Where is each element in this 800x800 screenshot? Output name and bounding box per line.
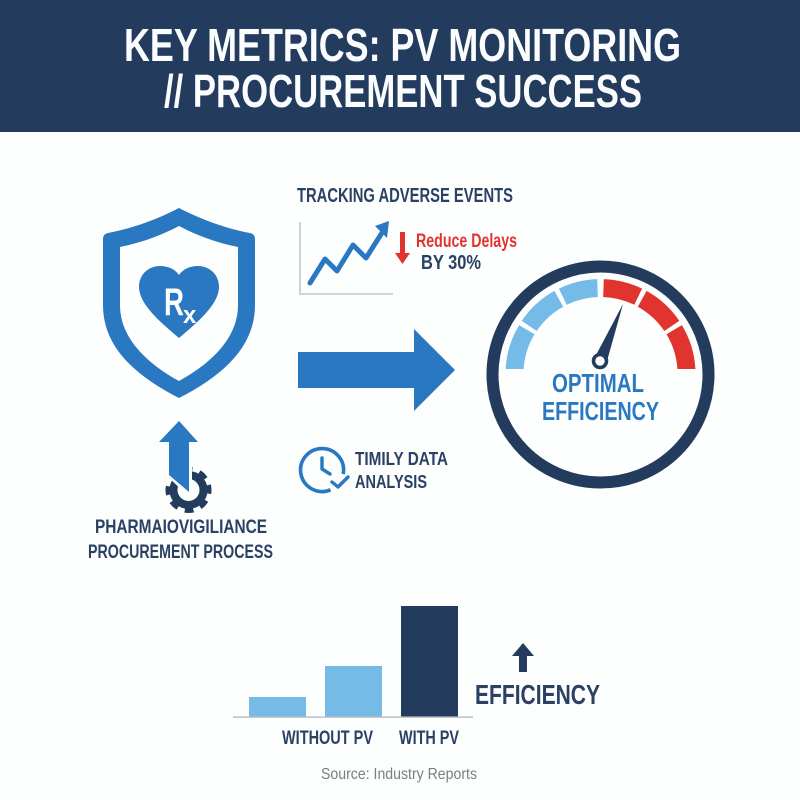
icon: shield with heart and Rx (103, 208, 255, 398)
gauge: optimal efficiency (492, 266, 708, 482)
bar labels: WITHOUT PV (282, 728, 373, 749)
gauge segments: low range (506, 279, 598, 369)
panel: pharmacovigilance procurement process (88, 208, 273, 563)
icon: clock with check (301, 449, 348, 492)
arrow: down red (395, 232, 410, 264)
callout: reduce delays by 30%: Reduce Delays (416, 230, 517, 252)
header banner (0, 0, 800, 132)
callout: timely data analysis (301, 449, 448, 492)
process label: PHARMAIOVIGILIANCE (95, 516, 267, 538)
icon: shield with heart and Rx: x (183, 302, 197, 329)
arrow: main flow right (298, 329, 455, 411)
gauge label (542, 368, 659, 426)
source note: Source: Industry Reports (321, 766, 477, 783)
gauge needle (594, 304, 623, 368)
gauge label: OPTIMAL (552, 368, 644, 398)
gauge label: EFFICIENCY (542, 396, 659, 426)
arrow: efficiency up (512, 643, 534, 672)
heading: tracking adverse events: TRACKING ADVERSE EVENTS (297, 184, 513, 207)
title: // PROCUREMENT SUCCESS (164, 65, 642, 117)
bar labels: WITH PV (399, 728, 459, 749)
process label: PROCUREMENT PROCESS (88, 541, 273, 563)
callout: timely data analysis: TIMILY DATA (355, 449, 448, 469)
callout: reduce delays by 30%: BY 30% (421, 252, 481, 274)
callout: timely data analysis: ANALYSIS (355, 472, 427, 492)
callout: efficiency up (475, 643, 600, 710)
icon: shield with heart and Rx: R (164, 281, 184, 324)
title (124, 19, 681, 117)
arrow: up from gear to shield (159, 421, 198, 492)
callout: efficiency up: EFFICIENCY (475, 679, 600, 710)
callout: reduce delays by 30% (395, 230, 517, 274)
bar labels (282, 728, 459, 749)
chart: rising trend line (300, 221, 393, 294)
process label (88, 516, 273, 563)
icon: gear (164, 462, 213, 514)
gauge segments: high range (603, 279, 695, 369)
bar chart: efficiency with and without PV (233, 606, 473, 749)
